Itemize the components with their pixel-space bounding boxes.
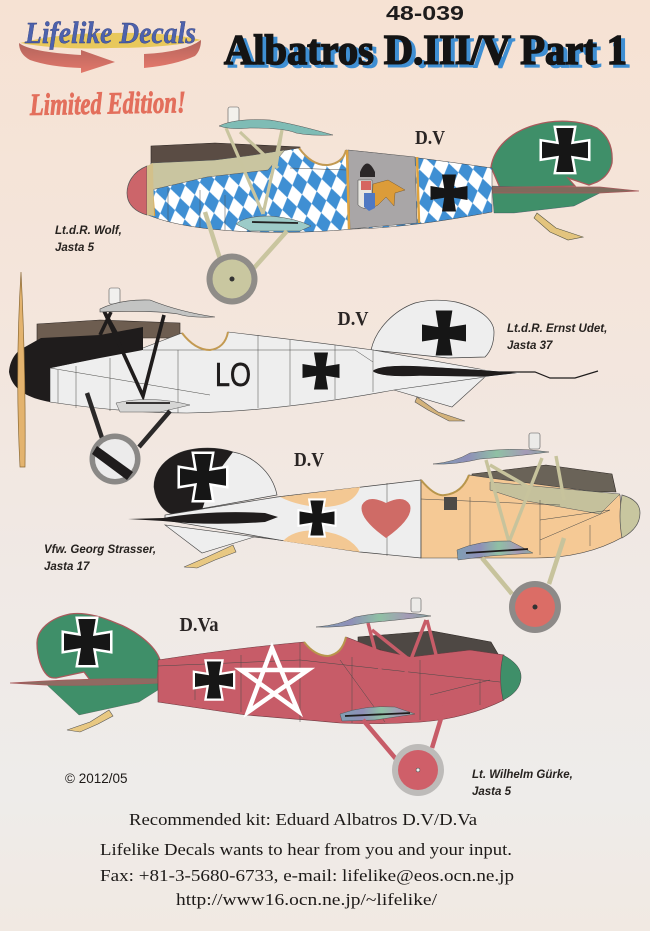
logo wordmark: Lifelike Decals: [24, 15, 196, 50]
tail plane: [492, 187, 639, 193]
plane 4: Gürke D.Va: [10, 598, 521, 796]
logo: Lifelike Decals: [19, 15, 201, 73]
cabane struts: [226, 128, 282, 214]
catalogue number: 48-039: [386, 3, 464, 25]
engine: [472, 465, 616, 492]
radiator tower: [228, 107, 239, 124]
tail lower: [492, 186, 606, 213]
fin and rudder: [491, 121, 612, 188]
panel lines: [50, 335, 373, 413]
nose band: [147, 163, 154, 216]
fuselage lozenge: [148, 148, 492, 232]
fuselage cross: [302, 352, 340, 390]
fin cross: [180, 454, 226, 500]
coaming: [421, 475, 469, 495]
type label D.Va: D.Va: [180, 614, 218, 636]
fuselage cross: [195, 662, 233, 698]
upper wing: [316, 613, 431, 627]
hatch: [444, 497, 457, 510]
landing gear: [205, 212, 287, 268]
wing slot: [126, 402, 170, 404]
pilot: Wolf: Lt.d.R. Wolf,: [55, 225, 122, 237]
upper wing: [100, 300, 215, 317]
plane 3: Strasser D.V: [128, 433, 640, 633]
landing gear: [363, 702, 446, 759]
tower: [411, 598, 421, 612]
landing gear: [87, 393, 170, 447]
fuselage white: [165, 480, 421, 558]
black cowling and spinner: [9, 327, 143, 402]
contact invitation: Lifelike Decals wants to hear from you and your input.: [100, 840, 512, 859]
lower wing: [236, 216, 311, 231]
fin cross: [542, 128, 588, 172]
lower wing: [340, 707, 415, 721]
pilot: Gürke: Lt. Wilhelm Gürke,: [472, 769, 573, 781]
lower wing: [457, 541, 533, 560]
orange strips: [152, 150, 419, 229]
upper wing: [219, 120, 333, 135]
grey panel with arms: [348, 150, 417, 229]
fin cross: [422, 310, 466, 356]
limited edition badge: Limited Edition!: [29, 84, 186, 122]
fuselage cross: [430, 174, 468, 212]
LO code: LO: [215, 356, 251, 393]
pilot: Strasser: Vfw. Georg Strasser,: [44, 544, 156, 556]
fuselage cross: [300, 500, 334, 536]
coaming: [182, 332, 228, 350]
cockpit coaming: [299, 148, 346, 165]
plane 2: Udet D.V: [9, 272, 598, 484]
cabane struts: [368, 620, 440, 712]
title: Albatros D.III/V Part 1: [224, 28, 627, 74]
plane 1: Wolf D.V: [127, 107, 639, 304]
fin and rudder: [371, 300, 494, 358]
pilot: Udet: Lt.d.R. Ernst Udet,: [507, 323, 607, 335]
wing slot: [345, 713, 410, 716]
engine: [151, 143, 300, 163]
wheel with black bar: [90, 434, 140, 484]
engine: [358, 631, 498, 657]
panel lines: [168, 168, 346, 230]
contact fax and email: Fax: +81-3-5680-6733, e-mail: lifelike@eos.ocn.ne.jp: [100, 866, 514, 885]
black struts: [100, 311, 164, 396]
heart: [362, 499, 410, 538]
recommended kit: Recommended kit: Eduard Albatros D.V/D.Va: [129, 810, 477, 829]
pilot: Strasser: Jasta 17: [44, 561, 90, 573]
tail lower: [165, 525, 279, 553]
tail skid: [184, 545, 236, 568]
olive cowling: [151, 150, 285, 190]
nose spinner: [127, 166, 147, 215]
pilot: Gürke: Jasta 5: [472, 786, 512, 798]
type label D.V: D.V: [294, 449, 324, 471]
fin black: [154, 448, 233, 514]
wing slot: [252, 222, 298, 223]
fuselage: [158, 637, 504, 724]
streak antenna: [485, 371, 598, 378]
coaming: [304, 637, 346, 656]
engine: [37, 320, 180, 342]
olive cowling: [490, 482, 620, 514]
pilot: Wolf: Jasta 5: [55, 242, 95, 254]
upper wing: [433, 449, 549, 464]
cabane struts: [486, 456, 564, 542]
coat of arms: [358, 164, 405, 211]
white pentagram: [241, 648, 308, 712]
wheel: [392, 744, 444, 796]
logo swoosh: [19, 33, 201, 73]
website: http://www16.ocn.ne.jp/~lifelike/: [176, 890, 437, 909]
fin cross: [64, 619, 110, 665]
tower: [109, 288, 120, 304]
wheel: [206, 254, 258, 304]
tail skid: [415, 397, 465, 421]
tower: [529, 433, 540, 449]
peach fuselage: [421, 475, 623, 558]
nose: [500, 655, 521, 700]
tail plane black: [128, 512, 278, 524]
tail plane: [10, 679, 158, 685]
propeller: [18, 272, 25, 467]
title: Albatros D.III/V Part 1: [228, 31, 631, 77]
tail skid: [534, 213, 583, 240]
rudder lower: [394, 376, 486, 407]
tail skid: [67, 710, 113, 732]
landing gear: [482, 538, 564, 594]
fuselage: [50, 332, 485, 413]
peach arcs: [280, 487, 360, 552]
wheel: [509, 581, 561, 633]
pilot: Udet: Jasta 37: [507, 340, 553, 352]
tail lower: [47, 682, 158, 715]
fin and rudder: [37, 613, 160, 680]
fin white: [154, 448, 277, 514]
nose: [620, 495, 640, 538]
elevator black: [372, 366, 520, 377]
panel lines: [387, 480, 610, 558]
type label D.V: D.V: [415, 127, 445, 149]
panel lines: [158, 643, 500, 723]
copyright: © 2012/05: [65, 771, 128, 786]
wing slot: [466, 549, 528, 553]
lower wing: [116, 399, 190, 412]
type label D.V: D.V: [338, 308, 369, 330]
